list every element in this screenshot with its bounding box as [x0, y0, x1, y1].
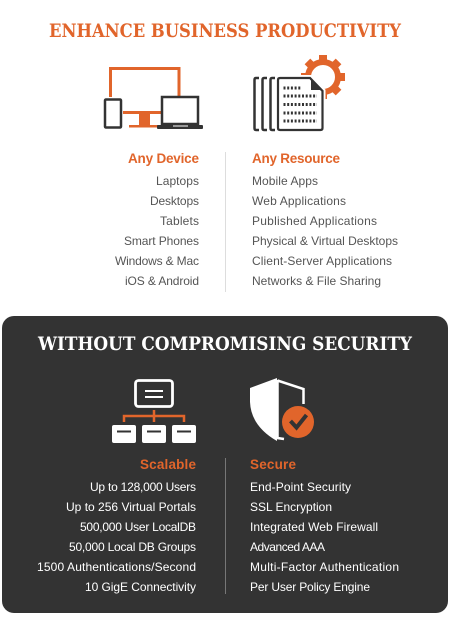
list: scalability: 1500 Authentications/Second	[37, 560, 196, 574]
list: scalability: 10 GigE Connectivity	[85, 580, 196, 594]
list: scalability: 50,000 Local DB Groups	[69, 540, 196, 554]
title: without compromising security: WITHOUT COMPROMISING SECURITY	[37, 333, 412, 355]
list: security features	[250, 480, 399, 594]
list: resources: Physical & Virtual Desktops	[252, 234, 398, 248]
list: scalability: Up to 256 Virtual Portals	[66, 500, 196, 514]
list: devices: Desktops	[150, 194, 199, 208]
list: scalability	[37, 480, 196, 594]
list: security features: Integrated Web Firewall	[250, 520, 378, 534]
list: scalability: Up to 128,000 Users	[90, 480, 196, 494]
panel: security	[2, 316, 448, 613]
list: resources	[252, 174, 398, 288]
icon: shield with check	[250, 378, 316, 441]
icon: network hierarchy	[112, 380, 196, 443]
heading: any device: Any Device	[128, 151, 199, 166]
list: security features: End-Point Security	[250, 480, 351, 494]
list: security features: Multi-Factor Authentication	[250, 560, 399, 574]
list: devices: Laptops	[156, 174, 199, 188]
list: devices: Windows & Mac	[115, 254, 199, 268]
heading: scalable: Scalable	[140, 457, 196, 472]
list: scalability: 500,000 User LocalDB	[80, 520, 196, 534]
list: resources: Mobile Apps	[252, 174, 318, 188]
heading: secure: Secure	[250, 457, 296, 472]
icon: documents and gear	[254, 55, 345, 130]
list: security features: Per User Policy Engine	[250, 580, 370, 594]
list: resources: Published Applications	[252, 214, 377, 228]
list: devices: Tablets	[160, 214, 199, 228]
list: security features: Advanced AAA	[250, 540, 325, 554]
list: resources: Networks & File Sharing	[252, 274, 381, 288]
list: resources: Web Applications	[252, 194, 346, 208]
list: security features: SSL Encryption	[250, 500, 332, 514]
list: devices	[115, 174, 199, 288]
title: enhance business productivity: ENHANCE BUSINESS PRODUCTIVITY	[49, 20, 401, 42]
heading: any resource: Any Resource	[252, 151, 340, 166]
list: resources: Client-Server Applications	[252, 254, 392, 268]
list: devices: Smart Phones	[124, 234, 199, 248]
icon: devices	[105, 68, 203, 129]
list: devices: iOS & Android	[125, 274, 199, 288]
